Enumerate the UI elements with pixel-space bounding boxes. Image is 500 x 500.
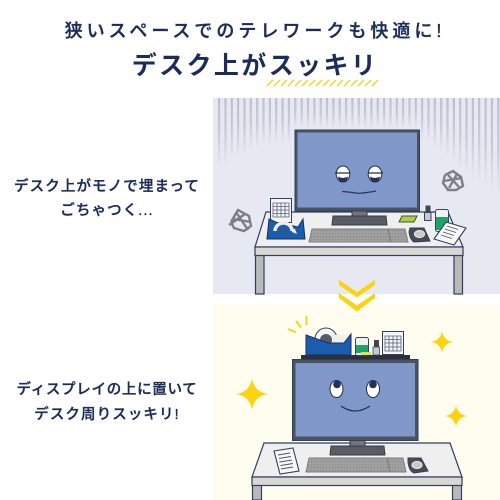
bottle	[424, 206, 431, 220]
monitor	[295, 130, 420, 225]
eraser	[436, 210, 448, 232]
calendar	[270, 198, 292, 222]
mouse on pad	[409, 228, 430, 242]
crumpled paper left	[229, 210, 251, 231]
sparkle top right	[431, 331, 453, 353]
monitor	[292, 360, 418, 455]
text: cluttered desk: デスク上がモノで埋まって	[14, 177, 200, 195]
bottle	[373, 340, 380, 355]
sticky notes	[399, 216, 417, 222]
crumpled paper right	[443, 171, 463, 190]
calendar	[382, 332, 404, 354]
desk	[252, 443, 462, 500]
tape dispenser	[306, 328, 351, 355]
face: happy	[330, 380, 380, 411]
paper	[434, 222, 466, 245]
title: 狭いスペースでのテレワークも快適に!	[65, 21, 445, 41]
title	[65, 21, 445, 80]
tape dispenser	[267, 219, 305, 239]
text: cluttered desk: ごちゃつく...	[60, 201, 154, 219]
desk	[255, 212, 463, 294]
mouse on pad	[408, 458, 428, 473]
keyboard	[309, 229, 408, 242]
title: デスク上がスッキリ	[132, 51, 378, 80]
panel: tidy desk	[213, 304, 500, 500]
shine lines	[288, 316, 306, 332]
panel: cluttered desk	[213, 98, 500, 294]
text: tidy desk: デスク周りスッキリ!	[34, 405, 180, 423]
chevrons arrow lower	[339, 293, 375, 312]
keyboard	[306, 458, 406, 472]
paper	[274, 448, 299, 474]
eraser	[356, 338, 371, 356]
background stripes	[218, 98, 499, 195]
text: tidy desk: ディスプレイの上に置いて	[17, 380, 197, 398]
face: tired	[335, 166, 383, 193]
sparkle large	[236, 378, 268, 410]
chevrons arrow	[339, 280, 375, 298]
text: cluttered desk	[14, 177, 200, 219]
sparkle bottom right	[445, 405, 467, 427]
text: tidy desk	[17, 380, 197, 423]
title underline hatch	[267, 80, 378, 86]
shelf	[301, 355, 410, 359]
